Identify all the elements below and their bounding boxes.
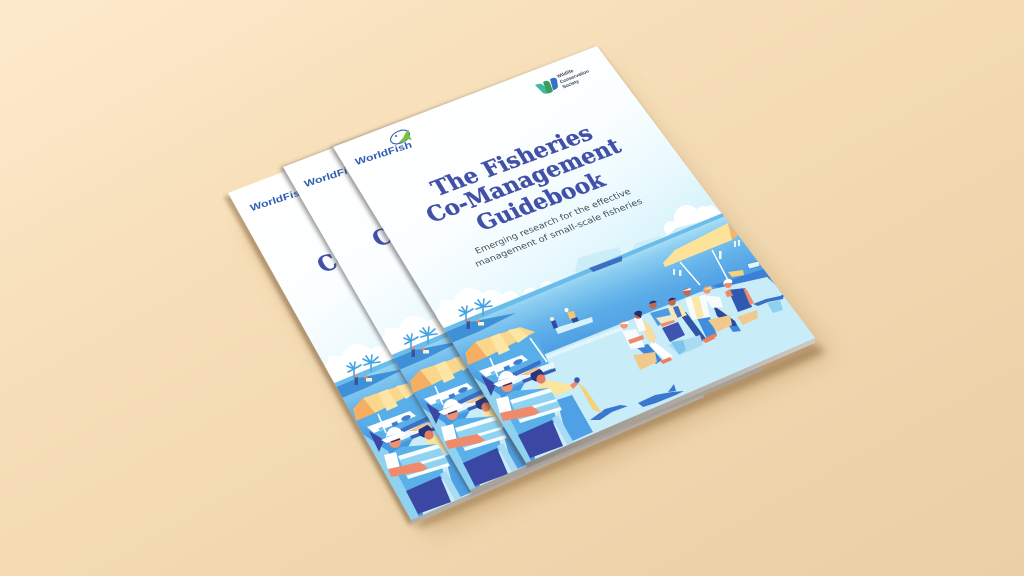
crowd: man with dark trousers (668, 298, 716, 343)
man: head and hat (501, 380, 513, 392)
man in striped shirt (470, 371, 574, 468)
small boat with fishers (550, 308, 593, 334)
back book (228, 171, 704, 524)
WorldFish fish mark (388, 127, 412, 147)
fish and crate on the right (753, 294, 784, 313)
crowd: woman in beige apron (634, 311, 673, 360)
middle book title fragment: Co-Management (368, 158, 573, 252)
right market stall (663, 223, 740, 285)
middle book cover art (283, 148, 757, 490)
subtitle: Emerging research for the effective (473, 187, 633, 257)
man: pale strip beside trousers (552, 415, 574, 446)
WCS W mark (535, 78, 558, 94)
woman holding fish (520, 368, 602, 443)
crowd: man in blue shirt (649, 301, 678, 327)
ship (589, 256, 622, 272)
man: trousers (518, 420, 563, 458)
title: Guidebook (472, 168, 610, 236)
WCS wordmark: Conservation (559, 69, 591, 85)
back book cover art (228, 171, 526, 520)
back book title fragment: Co-Management (313, 184, 518, 278)
logo: WorldFish (353, 127, 415, 168)
front book cover text (353, 68, 645, 270)
man: pale strip and navy back panel (470, 375, 533, 468)
crowd: table and counter (662, 322, 703, 355)
man: vest (500, 388, 556, 457)
logo: Wildlife Conservation Society (535, 68, 591, 94)
middle book (283, 148, 762, 494)
man: striped shirt (510, 388, 562, 423)
man: sleeve (496, 396, 512, 414)
front book cover (333, 46, 815, 463)
island with palms and figures (415, 299, 516, 352)
market crowd (619, 279, 758, 370)
far quay with moored boats (712, 261, 770, 288)
book shadow (224, 70, 831, 535)
crowd: seated man with cap (619, 321, 672, 364)
sea (415, 213, 800, 470)
middle book WorldFish wordmark: WorldFish (302, 162, 364, 190)
distant city and ship haze (575, 213, 722, 276)
title: The Fisheries (427, 121, 598, 202)
front book page edge (526, 338, 815, 468)
title: Co-Management (422, 134, 627, 228)
shadow cast on back book (280, 68, 760, 494)
WCS wordmark: Society (561, 79, 581, 90)
clouds (436, 205, 722, 327)
crowd: seated man in overalls (723, 279, 754, 312)
WorldFish wordmark: WorldFish (353, 140, 415, 168)
crowd: baskets (633, 310, 758, 370)
WCS wordmark (556, 68, 591, 90)
quay ground (515, 277, 840, 472)
shadow cast on middle book (330, 48, 812, 466)
left market stall (465, 327, 556, 390)
crowd: standing man in yellow (682, 288, 717, 340)
back book page edge (411, 392, 704, 524)
subtitle: management of small-scale fisheries (473, 197, 645, 270)
cover illustration (250, 0, 860, 475)
foreground fish (590, 384, 684, 420)
WCS wordmark: Wildlife (556, 68, 575, 80)
crowd: man in white shirt (702, 286, 741, 332)
middle book page edge (470, 365, 762, 494)
back book WorldFish wordmark: WorldFish (248, 186, 310, 214)
man: arm (500, 406, 540, 421)
sky (250, 0, 860, 475)
